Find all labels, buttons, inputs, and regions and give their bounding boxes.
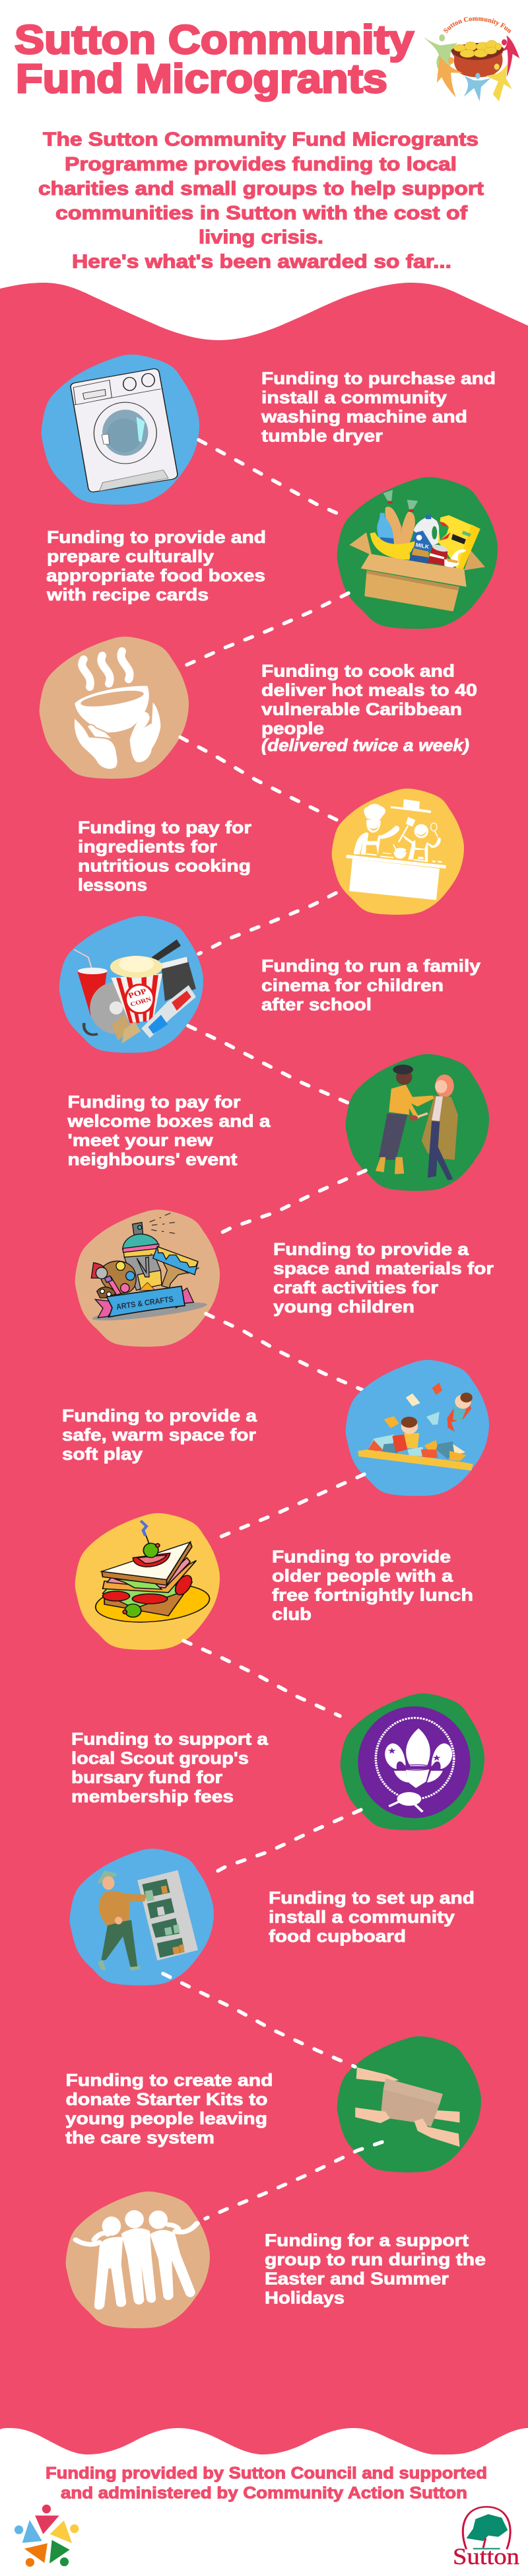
text: lunch club: older people with a bbox=[272, 1565, 453, 1585]
text: hot meals: (delivered twice a week) bbox=[261, 735, 469, 755]
title bbox=[15, 17, 414, 101]
arrow: scouts to food cupboard bbox=[209, 1810, 361, 1876]
text: soft play: Funding to provide a bbox=[62, 1406, 257, 1425]
panel: food box blob bbox=[337, 477, 498, 629]
intro paragraph: Programme provides funding to local bbox=[65, 154, 457, 175]
text: soft play bbox=[62, 1406, 257, 1464]
text: cooking lessons bbox=[78, 818, 251, 894]
text: food boxes bbox=[46, 527, 266, 604]
intro paragraph: The Sutton Community Fund Microgrants bbox=[43, 129, 478, 151]
panel: arts and crafts blob bbox=[75, 1209, 220, 1347]
icon: scout badge: ★ bbox=[388, 1747, 396, 1755]
title: Sutton Community bbox=[15, 17, 414, 62]
icon: popcorn, film and 3D glasses: POP bbox=[127, 986, 148, 1000]
panel: starter kits blob bbox=[337, 2036, 481, 2172]
logo emblem: tree in arch bbox=[463, 2507, 510, 2549]
text: lunch club: club bbox=[272, 1604, 312, 1624]
icon: two neighbours shaking hands bbox=[376, 1065, 458, 1180]
arrow: cooking to cinema bbox=[199, 893, 336, 954]
text: family cinema: after school bbox=[261, 995, 372, 1015]
text: hot meals: people bbox=[261, 718, 324, 738]
text: lunch club bbox=[272, 1546, 473, 1624]
arrow: soft play to lunch club bbox=[214, 1474, 364, 1540]
icon: scout badge bbox=[358, 1706, 471, 1818]
panel: scout blob bbox=[341, 1694, 484, 1830]
icon: club sandwich on a plate bbox=[93, 1521, 212, 1626]
text: craft activities: craft activities for bbox=[273, 1277, 438, 1297]
text: starter kits: donate Starter Kits to bbox=[66, 2089, 268, 2109]
text: starter kits bbox=[65, 2070, 273, 2147]
icon: spray can, palette and banner bbox=[91, 1213, 208, 1324]
icon: person stocking a cupboard bbox=[97, 1870, 198, 1971]
text: soft play: safe, warm space for bbox=[62, 1425, 256, 1445]
icon: food box bbox=[349, 490, 485, 612]
text: hot meals bbox=[261, 661, 477, 755]
panel: family cinema blob bbox=[59, 916, 203, 1053]
text: washing machine: tumble dryer bbox=[261, 426, 383, 446]
logo figures and pot bbox=[423, 34, 519, 101]
text: cooking lessons: lessons bbox=[78, 875, 147, 894]
panel: washing machine blob bbox=[42, 355, 199, 505]
text: food cupboard: Funding to set up and bbox=[269, 1888, 475, 1908]
text: Scout bursary: bursary fund for bbox=[71, 1768, 222, 1787]
icon: three friends arm in arm bbox=[76, 2210, 197, 2310]
arrow: food box to hot meal bbox=[186, 593, 348, 665]
text: cooking lessons: ingredients for bbox=[78, 836, 217, 856]
text: craft activities: Funding to provide a bbox=[273, 1239, 469, 1259]
arrow: hot meal to cooking bbox=[180, 737, 342, 822]
panel: soft play blob bbox=[346, 1360, 489, 1496]
text: family cinema: Funding to run a family bbox=[261, 956, 481, 976]
icon: scout badge: ★ bbox=[433, 1754, 441, 1762]
footer text bbox=[46, 2464, 487, 2502]
text: neighbours: 'meet your new bbox=[67, 1130, 213, 1150]
text: hot meals: deliver hot meals to 40 bbox=[261, 680, 477, 699]
text: cooking lessons: nutritious cooking bbox=[78, 856, 251, 876]
icon: hands passing a box bbox=[355, 2067, 459, 2147]
text: support group: Funding for a support bbox=[265, 2230, 469, 2250]
panel: lunch club blob bbox=[75, 1513, 220, 1650]
intro paragraph: communities in Sutton with the cost of bbox=[55, 203, 467, 224]
panel: cooking lessons blob bbox=[332, 789, 464, 915]
text: lunch club: Funding to provide bbox=[272, 1546, 451, 1566]
panel: support group blob bbox=[66, 2192, 210, 2328]
text: Scout bursary: membership fees bbox=[71, 1786, 234, 1806]
text: washing machine: washing machine and bbox=[261, 407, 467, 427]
arrow: food cupboard to starter kits bbox=[163, 1974, 355, 2067]
text: starter kits: the care system bbox=[65, 2128, 214, 2147]
text: craft activities: young children bbox=[273, 1297, 414, 1316]
text: Scout bursary bbox=[71, 1729, 269, 1806]
icon: children in a soft play pit bbox=[358, 1382, 473, 1471]
logo wordmark: Sutton bbox=[453, 2544, 519, 2569]
text: cooking lessons: Funding to pay for bbox=[78, 818, 251, 838]
footer text: Funding provided by Sutton Council and supported bbox=[46, 2464, 487, 2482]
text: neighbours bbox=[67, 1092, 271, 1169]
panel: hot meal blob bbox=[40, 637, 189, 779]
intro paragraph bbox=[38, 129, 484, 272]
panel: food cupboard blob bbox=[70, 1849, 214, 1986]
arrow: washer to food box bbox=[199, 440, 339, 514]
text: hot meals: Funding to cook and bbox=[261, 661, 455, 680]
text: washing machine: Funding to purchase and bbox=[261, 369, 496, 388]
title: Fund Microgrants bbox=[16, 56, 387, 101]
text: support group: group to run during the bbox=[265, 2250, 486, 2270]
text: Scout bursary: local Scout group's bbox=[71, 1748, 249, 1768]
text: starter kits: young people leaving bbox=[65, 2108, 267, 2128]
intro paragraph: living crisis. bbox=[199, 227, 323, 248]
logo: Community Action Sutton bbox=[15, 2505, 79, 2567]
text: neighbours: welcome boxes and a bbox=[67, 1111, 271, 1131]
text: food boxes: with recipe cards bbox=[46, 585, 209, 604]
logo: Sutton Community Fund bbox=[423, 17, 520, 102]
text: washing machine bbox=[261, 369, 496, 446]
footer text: and administered by Community Action Sutton bbox=[61, 2484, 467, 2502]
arrow: starter kits to support group bbox=[205, 2142, 382, 2219]
text: food boxes: prepare culturally bbox=[47, 546, 214, 566]
text: support group: Holidays bbox=[265, 2288, 345, 2308]
text: soft play: soft play bbox=[62, 1444, 143, 1464]
text: Scout bursary: Funding to support a bbox=[71, 1729, 269, 1749]
icon: spray can, palette and banner: ARTS & CRAFTS bbox=[116, 1295, 174, 1312]
text: food boxes: appropriate food boxes bbox=[46, 565, 265, 585]
panel: neighbours blob bbox=[346, 1054, 489, 1191]
intro paragraph: charities and small groups to help support bbox=[38, 178, 484, 199]
text: hot meals: vulnerable Caribbean bbox=[261, 699, 462, 719]
text: craft activities bbox=[273, 1239, 494, 1316]
text: neighbours: Funding to pay for bbox=[67, 1092, 240, 1112]
icon: washing machine bbox=[71, 369, 178, 492]
text: food cupboard bbox=[269, 1888, 475, 1946]
text: lunch club: free fortnightly lunch bbox=[272, 1585, 473, 1605]
icon: chefs at a counter bbox=[346, 799, 446, 900]
icon: popcorn, film and 3D glasses bbox=[74, 939, 196, 1044]
icon: food box: MILK bbox=[415, 541, 430, 550]
text: food boxes: Funding to provide and bbox=[47, 527, 266, 547]
arrow: crafts to soft play bbox=[206, 1314, 364, 1390]
text: starter kits: Funding to create and bbox=[66, 2070, 273, 2090]
text: food cupboard: food cupboard bbox=[269, 1926, 406, 1946]
text: neighbours: neighbours' event bbox=[67, 1149, 238, 1169]
text: support group bbox=[265, 2230, 486, 2308]
text: craft activities: space and materials for bbox=[273, 1258, 494, 1278]
logo text: Sutton Community Fund bbox=[444, 17, 511, 33]
intro paragraph: Here's what's been awarded so far... bbox=[72, 251, 451, 272]
icon: bowl held in hands with steam bbox=[75, 651, 160, 769]
arrow: lunch club to scouts bbox=[183, 1641, 340, 1716]
text: support group: Easter and Summer bbox=[265, 2268, 449, 2288]
text: family cinema bbox=[261, 956, 481, 1015]
text: food cupboard: install a community bbox=[269, 1907, 455, 1927]
text: washing machine: install a community bbox=[261, 388, 447, 408]
logo: Sutton Council bbox=[453, 2507, 519, 2569]
icon: popcorn, film and 3D glasses: CORN bbox=[129, 996, 153, 1008]
text: family cinema: cinema for children bbox=[261, 976, 444, 995]
arrow: neighbours to crafts bbox=[214, 1170, 366, 1236]
arrow: cinema to neighbours bbox=[188, 1026, 348, 1103]
